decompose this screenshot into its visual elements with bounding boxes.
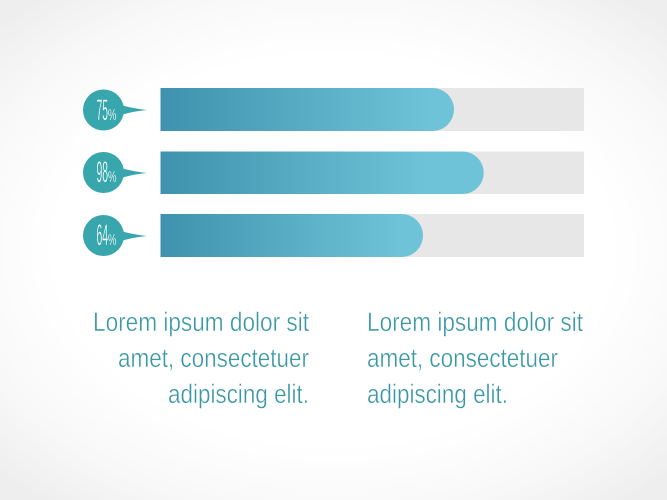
bar track 2 [160,152,584,194]
callout: 64%: 64 [96,219,108,252]
text block: right: amet, consectetuer [367,343,558,373]
callout: 98%: % [108,169,116,186]
text block: right: adipiscing elit. [367,379,508,409]
bar track 3 [160,214,584,257]
text block: right [367,307,583,409]
bar chart [83,88,584,257]
callout: 98% [83,152,147,193]
callout: 75% [83,90,147,130]
text block: left: amet, consectetuer [118,343,309,373]
callout: 75%: 75 [96,94,108,127]
callout: 98%: 98 [96,156,108,189]
text block: left: adipiscing elit. [168,379,309,409]
callout: 64%: % [108,232,116,249]
bar row: 64% [83,214,584,257]
text block: right: Lorem ipsum dolor sit [367,307,583,337]
bar row: 98% [83,152,584,194]
bar track 1 [160,88,584,131]
callout: 75%: % [108,107,116,124]
bar fill 2 [160,152,484,194]
text block: left: Lorem ipsum dolor sit [93,307,309,337]
callout: 64% [83,215,147,256]
bar fill 3 [160,214,423,257]
bar row: 75% [83,88,584,131]
text block: left [93,307,309,409]
bar fill 1 [160,88,454,131]
